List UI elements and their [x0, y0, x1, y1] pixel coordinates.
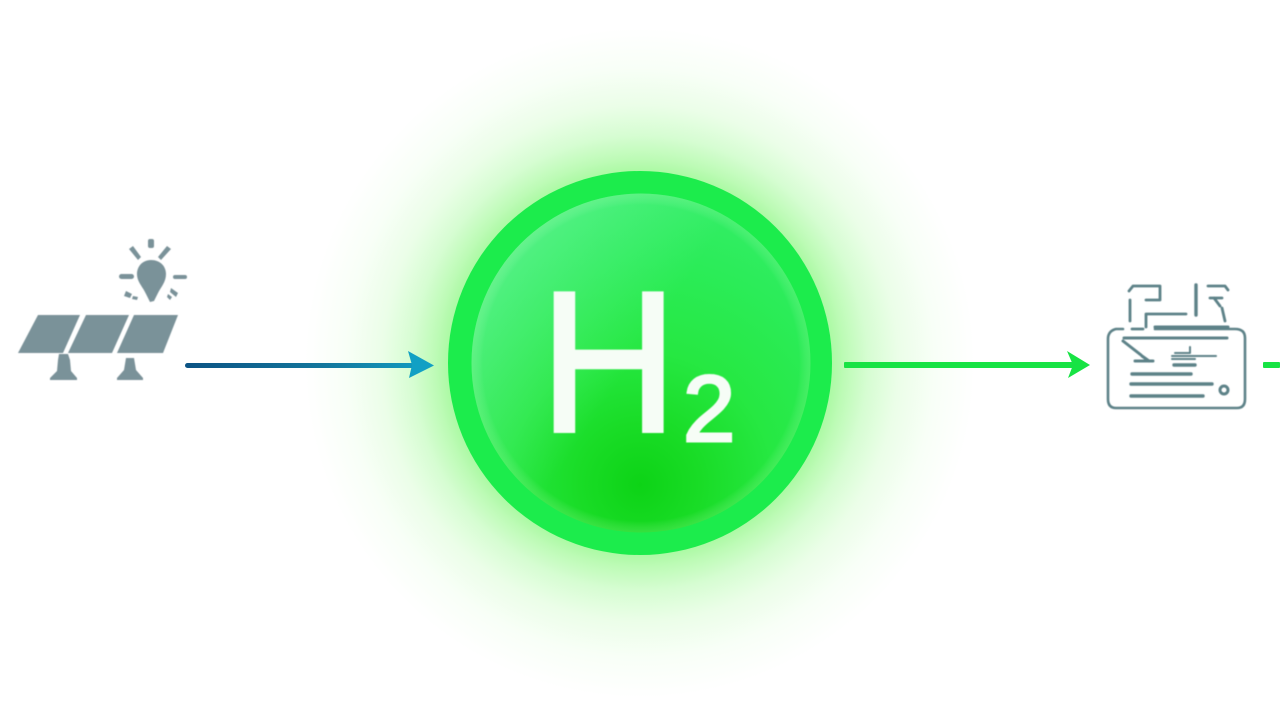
text lines — [1131, 374, 1212, 396]
icon: solar panel with light bulb — [18, 239, 187, 380]
background glow — [300, 20, 980, 710]
icon: solar panels — [18, 315, 178, 380]
indicator dot — [1220, 386, 1228, 394]
arrow: storage output — [1263, 362, 1280, 368]
inner sphere — [472, 194, 810, 532]
top connectors — [1129, 285, 1228, 329]
icon: storage device — [1108, 285, 1245, 408]
icon: light bulb with rays — [119, 239, 187, 302]
H2 label: 2 — [683, 356, 735, 461]
outer ring — [448, 171, 832, 555]
internal traces — [1123, 327, 1228, 365]
device body — [1108, 329, 1245, 408]
H2 label: H — [540, 251, 677, 474]
arrow: solar to hydrogen — [185, 351, 434, 378]
arrow: hydrogen to storage — [844, 351, 1090, 378]
hydrogen circle — [448, 171, 832, 555]
